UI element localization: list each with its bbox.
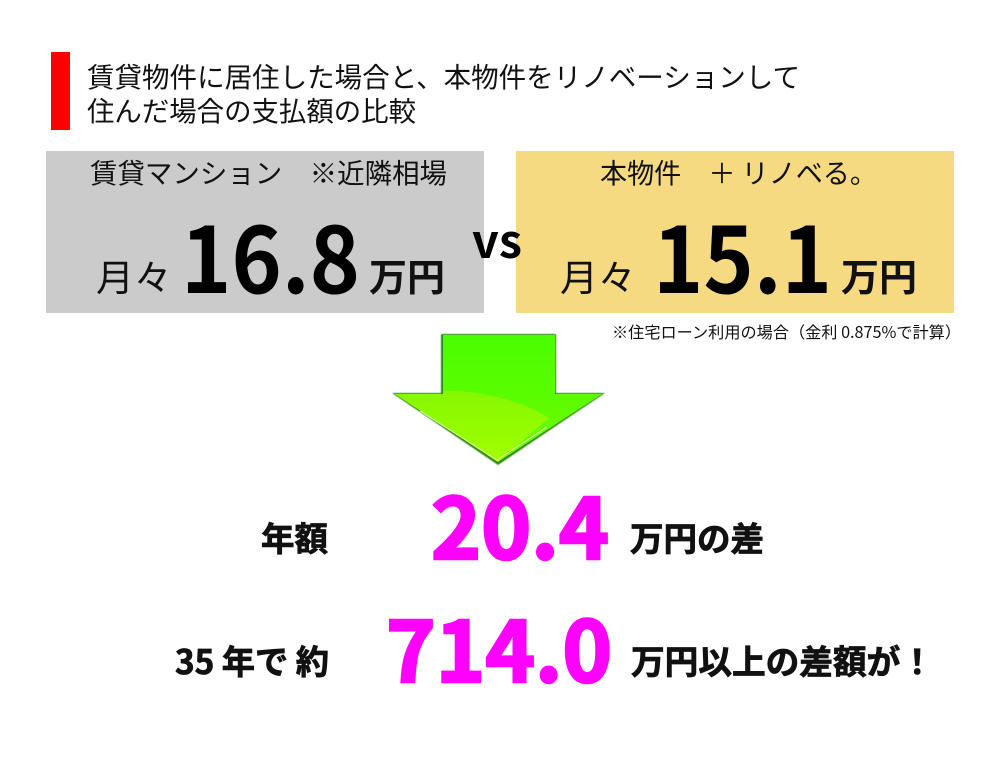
panel: rental apartment — [46, 151, 484, 320]
title: 賃貸物件に居住した場合と、本物件をリノベーションして — [87, 55, 800, 95]
rental monthly unit: 万円 — [369, 247, 445, 302]
title accent bar — [51, 52, 70, 130]
property monthly value: 15.1 — [653, 188, 832, 320]
35-year value: 714.0 — [386, 586, 612, 707]
title: 住んだ場合の支払額の比較 — [87, 89, 416, 129]
vs label: vs — [472, 206, 522, 272]
property monthly unit: 万円 — [841, 247, 917, 302]
footnote: ※住宅ローン利用の場合（金利 0.875%で計算） — [612, 319, 961, 343]
annual value: 20.4 — [431, 463, 609, 584]
35-year difference row — [175, 586, 934, 707]
rental heading: 賃貸マンション ※近隣相場 — [90, 151, 447, 191]
rental monthly label: 月々 — [96, 248, 172, 302]
annual difference row — [261, 463, 764, 584]
annual unit: 万円の差 — [630, 512, 764, 561]
panel: this property plus renovation — [516, 151, 954, 320]
title — [87, 55, 800, 129]
icon: green down arrow — [392, 334, 605, 465]
property monthly label: 月々 — [560, 248, 636, 302]
35-year unit: 万円以上の差額が！ — [631, 635, 934, 684]
35-year label: 35 年で 約 — [175, 635, 329, 684]
rental monthly value: 16.8 — [181, 188, 360, 320]
annual label: 年額 — [261, 512, 328, 561]
property heading: 本物件 ＋ リノベる。 — [600, 151, 877, 191]
